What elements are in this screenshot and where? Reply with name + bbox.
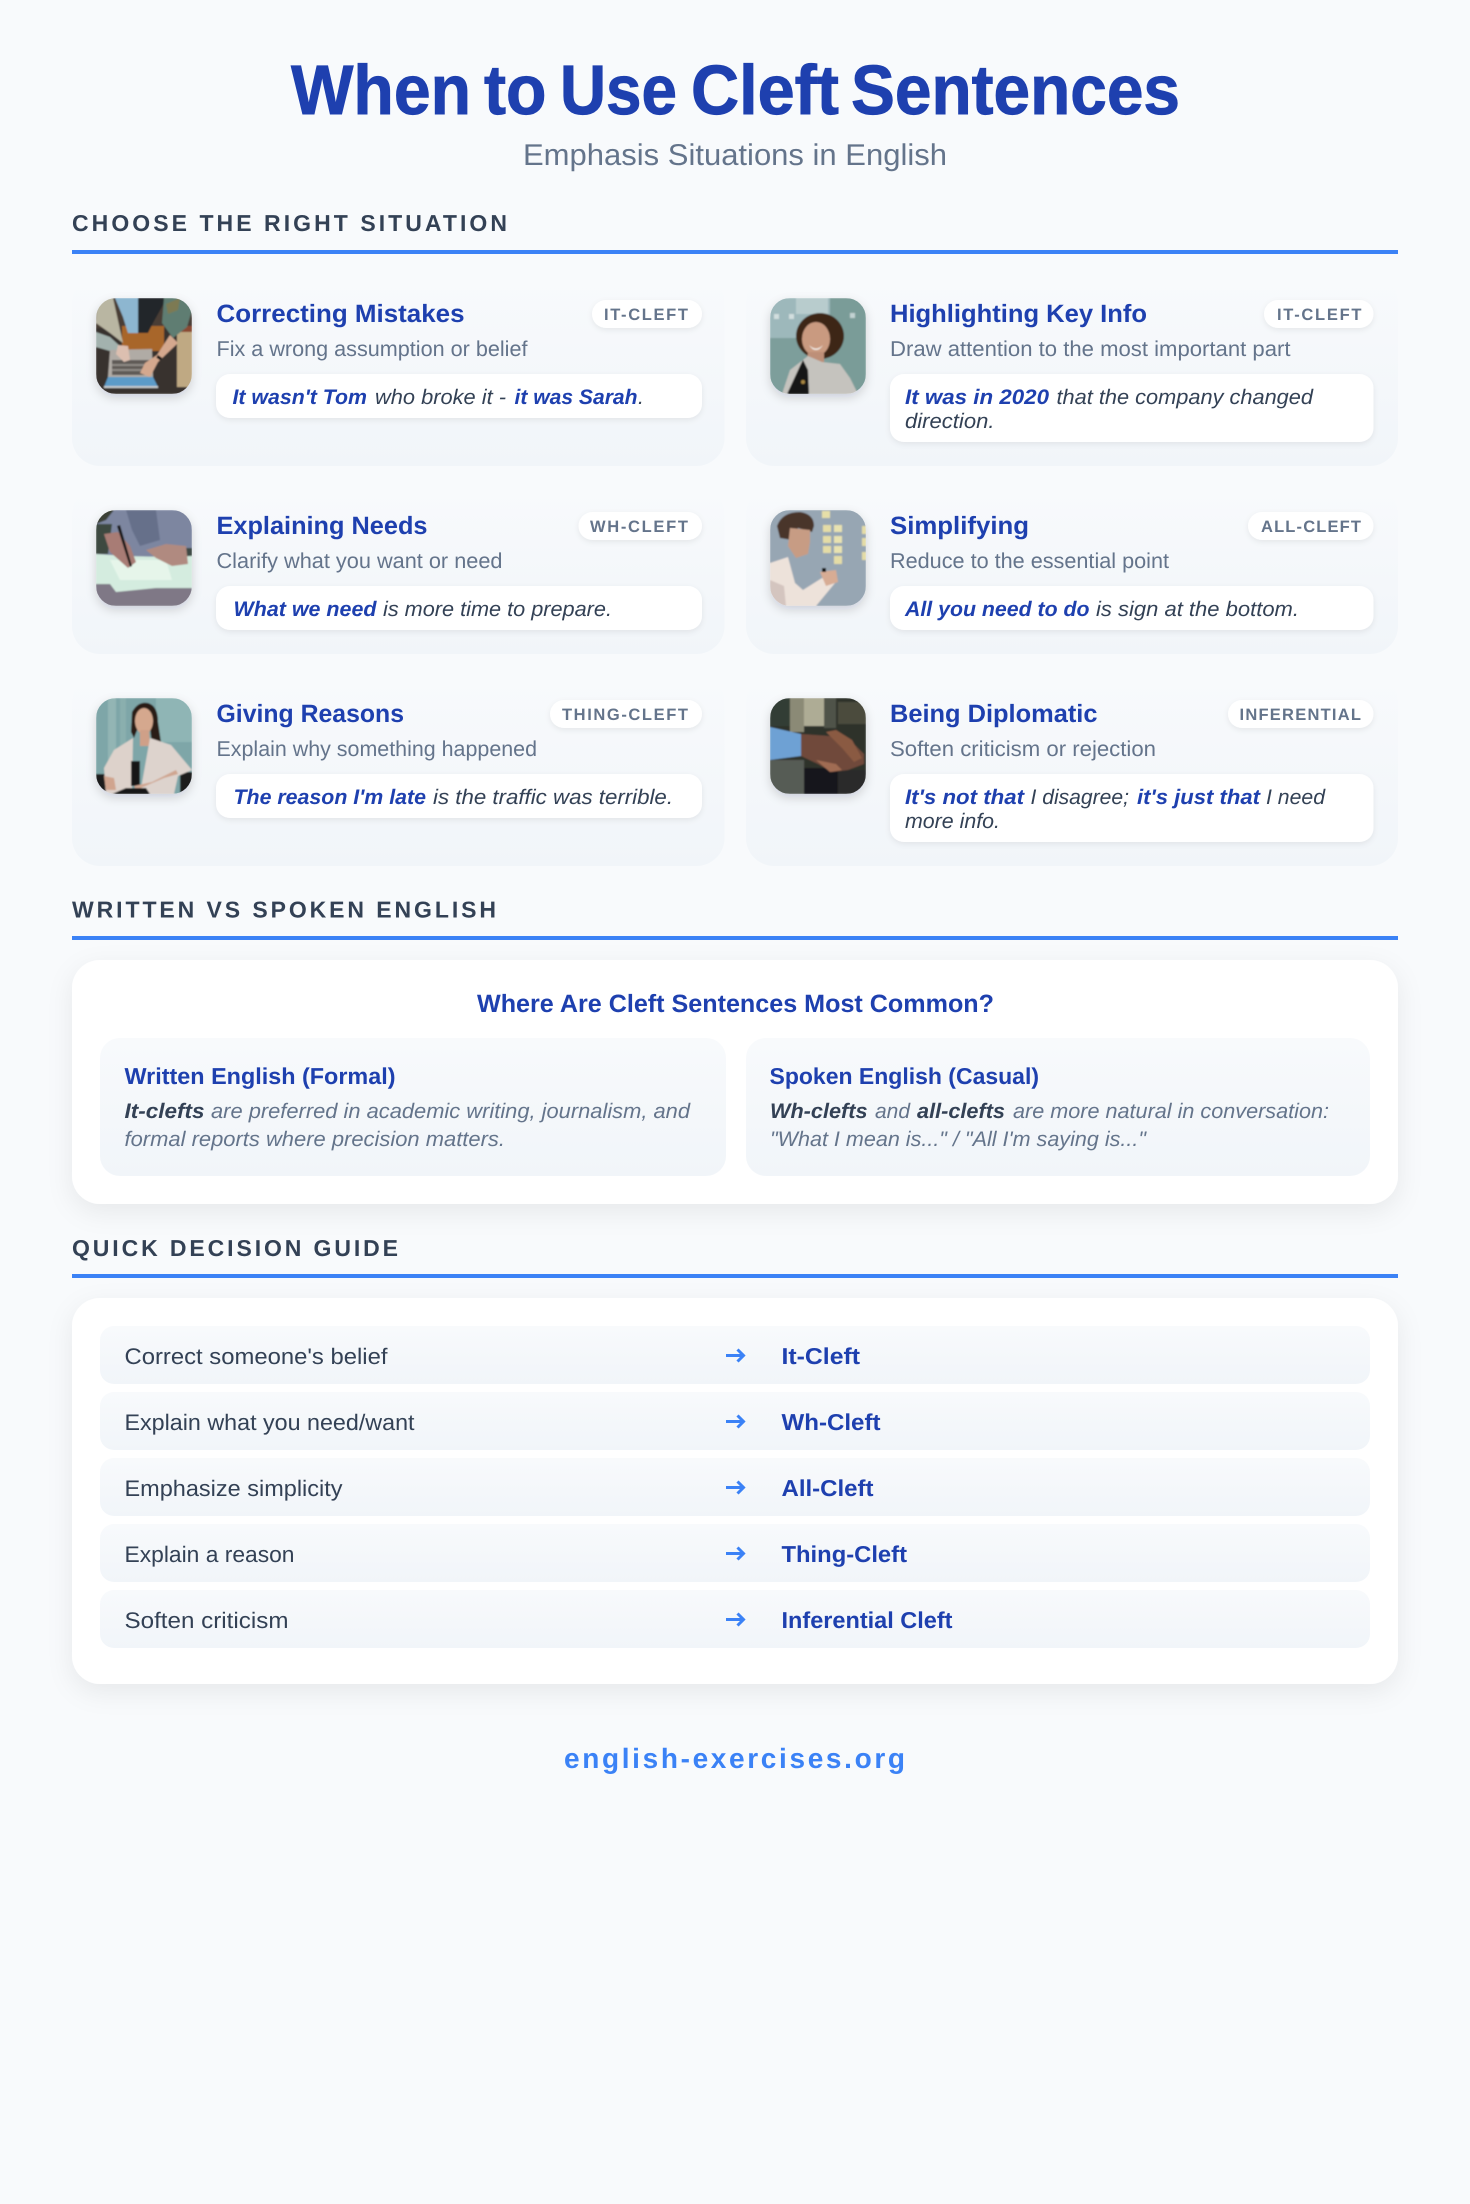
- section heading: written vs spoken english: WRITTEN VS SPOKEN ENGLISH: [72, 896, 496, 922]
- description: Reduce to the essential point: [890, 549, 1169, 573]
- card: spoken english: "What I mean is..." / "All I'm saying is...": [770, 1128, 1148, 1151]
- panel: being diplomatic: [764, 698, 1376, 848]
- panel: correcting mistakes: [90, 298, 704, 423]
- icon: businesswoman portrait photo: [770, 298, 866, 394]
- icon: team at laptop photo: [96, 298, 192, 394]
- row: soften criticism: Inferential Cleft: [782, 1607, 953, 1633]
- tag: all-cleft: ALL-CLEFT: [1261, 518, 1361, 536]
- row: correct someone's belief: Correct someone's belief: [124, 1344, 388, 1369]
- heading: Simplifying: [890, 512, 1029, 540]
- example: it was Sarah: [514, 386, 638, 409]
- example: it's just that: [1137, 786, 1261, 809]
- row: soften criticism: [100, 1590, 1370, 1648]
- description: Clarify what you want or need: [216, 549, 502, 573]
- example: [890, 774, 1374, 842]
- card: spoken english: and: [875, 1100, 911, 1123]
- panel: where are cleft sentences most common: [72, 960, 1398, 1204]
- description: Soften criticism or rejection: [890, 737, 1156, 761]
- card: spoken english: [746, 1038, 1370, 1176]
- example: It's not that: [905, 786, 1025, 809]
- icon: hands signing paper photo: [96, 510, 192, 606]
- example: is more time to prepare.: [383, 598, 612, 621]
- heading: Highlighting Key Info: [890, 300, 1147, 328]
- row: explain a reason: [100, 1524, 1370, 1582]
- example: that the company changed: [1056, 386, 1314, 409]
- title: Use: [560, 51, 677, 129]
- card: written english: [100, 1038, 726, 1176]
- tag: wh-cleft: WH-CLEFT: [590, 518, 688, 536]
- title: Cleft: [691, 51, 839, 129]
- tag: all-cleft: [1248, 512, 1374, 540]
- tag: thing-cleft: [550, 700, 702, 728]
- row: emphasize simplicity: Emphasize simplicity: [124, 1476, 343, 1501]
- section heading: written vs spoken english: [72, 896, 1398, 940]
- row: emphasize simplicity: All-Cleft: [782, 1475, 874, 1501]
- heading: Correcting Mistakes: [216, 300, 464, 328]
- card: spoken english: Wh-clefts: [770, 1100, 868, 1123]
- example: The reason I'm late: [234, 786, 426, 809]
- heading: Giving Reasons: [216, 700, 404, 728]
- row: explain what you need: Explain what you need/want: [124, 1410, 415, 1435]
- example: [890, 586, 1374, 630]
- panel: quick decision guide: [72, 1298, 1398, 1684]
- example: I disagree;: [1030, 786, 1129, 809]
- subtitle: Emphasis Situations in English: [523, 139, 947, 172]
- card: written english: It-clefts: [124, 1100, 204, 1123]
- example: It wasn't Tom: [232, 386, 367, 409]
- row: explain a reason: Explain a reason: [124, 1542, 294, 1567]
- tag: wh-cleft: [578, 512, 702, 540]
- footer: website: english-exercises.org: [564, 1743, 905, 1774]
- icon: seated woman portrait photo: [96, 698, 192, 794]
- title: to: [484, 51, 546, 129]
- card: written english: are preferred in academic writing, journalism, and: [211, 1100, 691, 1123]
- panel: simplifying: [764, 510, 1376, 636]
- description: Fix a wrong assumption or belief: [216, 337, 528, 361]
- example: [890, 374, 1374, 442]
- example: who broke it -: [375, 386, 506, 409]
- example: .: [638, 386, 644, 409]
- row: explain what you need: [100, 1392, 1370, 1450]
- example: is sign at the bottom.: [1096, 598, 1299, 621]
- description: Explain why something happened: [216, 737, 537, 761]
- card: spoken english: all-clefts: [917, 1100, 1005, 1123]
- panel heading: Where Are Cleft Sentences Most Common?: [477, 990, 994, 1018]
- section heading: choose the right situation: [72, 210, 1398, 254]
- example: [216, 374, 702, 418]
- row: correct someone's belief: [100, 1326, 1370, 1384]
- panel: highlighting key info: [764, 298, 1376, 448]
- description: Draw attention to the most important part: [890, 337, 1291, 361]
- row: soften criticism: Soften criticism: [124, 1608, 288, 1633]
- section heading: quick decision guide: [72, 1235, 1398, 1278]
- heading: Explaining Needs: [216, 512, 428, 540]
- title: [291, 51, 1180, 129]
- panel: giving reasons: [90, 698, 704, 823]
- tag: it-cleft: IT-CLEFT: [1277, 306, 1362, 324]
- title: When: [291, 51, 471, 129]
- example: direction.: [905, 410, 994, 433]
- tag: thing-cleft: THING-CLEFT: [562, 706, 688, 724]
- tag: it-cleft: IT-CLEFT: [604, 306, 688, 324]
- tag: inferential: INFERENTIAL: [1240, 706, 1361, 724]
- example: is the traffic was terrible.: [433, 786, 673, 809]
- card: written english: formal reports where precision matters.: [124, 1128, 505, 1151]
- heading: Being Diplomatic: [890, 700, 1098, 728]
- example: I need: [1266, 786, 1326, 809]
- example: [216, 774, 702, 818]
- card: written english: Written English (Formal): [124, 1063, 396, 1089]
- section heading: quick decision guide: QUICK DECISION GUIDE: [72, 1235, 398, 1261]
- tag: it-cleft: [592, 300, 702, 328]
- tag: inferential: [1228, 700, 1374, 728]
- card: spoken english: are more natural in conversation:: [1013, 1100, 1329, 1123]
- row: explain a reason: Thing-Cleft: [782, 1541, 907, 1567]
- icon: handshake photo: [770, 698, 866, 794]
- example: more info.: [905, 810, 1000, 833]
- icon: man at sticky-note wall photo: [770, 510, 866, 606]
- example: [216, 586, 702, 630]
- section heading: choose the right situation: CHOOSE THE RIGHT SITUATION: [72, 210, 507, 236]
- row: correct someone's belief: It-Cleft: [782, 1343, 860, 1369]
- card: spoken english: Spoken English (Casual): [770, 1063, 1039, 1089]
- panel: explaining needs: [90, 510, 705, 636]
- tag: it-cleft: [1264, 300, 1374, 328]
- example: It was in 2020: [905, 386, 1049, 409]
- title: Sentences: [851, 51, 1180, 129]
- row: emphasize simplicity: [100, 1458, 1370, 1516]
- row: explain what you need: Wh-Cleft: [782, 1409, 881, 1435]
- example: All you need to do: [904, 598, 1090, 621]
- example: What we need: [234, 598, 378, 621]
